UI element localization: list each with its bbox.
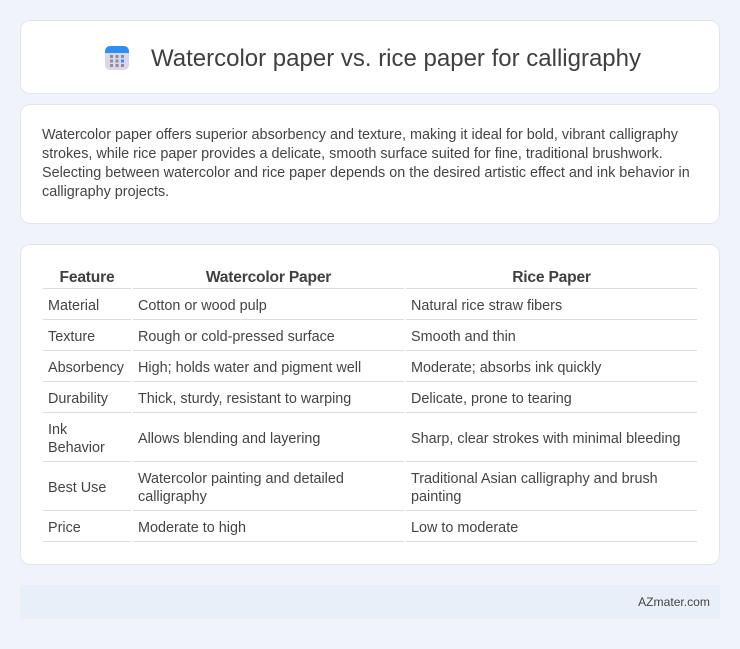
comparison table: Moderate to high <box>138 520 246 536</box>
comparison table: Cotton or wood pulp <box>138 298 267 314</box>
comparison table: calligraphy <box>138 489 207 505</box>
summary text: calligraphy projects. <box>42 184 169 200</box>
title card <box>20 20 720 94</box>
comparison table: Thick, sturdy, resistant to warping <box>138 391 351 407</box>
summary text: Selecting between watercolor and rice paper depends on the desired artistic effect and ink behavior in <box>42 165 690 181</box>
comparison table: Best Use <box>48 480 106 496</box>
comparison table: Natural rice straw fibers <box>411 298 562 314</box>
comparison table: Low to moderate <box>411 520 518 536</box>
comparison table: Watercolor painting and detailed <box>138 471 344 487</box>
comparison table: Sharp, clear strokes with minimal bleeding <box>411 431 681 447</box>
comparison table: Feature <box>60 269 114 286</box>
comparison table: Material <box>48 298 99 314</box>
comparison table: Rough or cold-pressed surface <box>138 329 335 345</box>
comparison table: Traditional Asian calligraphy and brush <box>411 471 658 487</box>
table card <box>20 244 720 565</box>
comparison table: Moderate; absorbs ink quickly <box>411 360 601 376</box>
comparison table: Ink <box>48 422 67 438</box>
summary text <box>42 127 690 200</box>
footer bar <box>20 585 720 619</box>
comparison table: Delicate, prone to tearing <box>411 391 572 407</box>
comparison table: Durability <box>48 391 108 407</box>
comparison table: Smooth and thin <box>411 329 516 345</box>
summary text: Watercolor paper offers superior absorbency and texture, making it ideal for bold, vibrant calligraphy <box>42 127 678 143</box>
comparison table: Behavior <box>48 440 105 456</box>
comparison table: Allows blending and layering <box>138 431 320 447</box>
comparison table: Absorbency <box>48 360 124 376</box>
icon: calendar <box>105 46 129 70</box>
comparison table: Watercolor Paper <box>206 269 331 286</box>
footer credit: AZmater.com <box>638 595 710 609</box>
comparison table: Rice Paper <box>512 269 591 286</box>
comparison table <box>48 269 681 536</box>
comparison table: painting <box>411 489 461 505</box>
comparison table: Texture <box>48 329 95 345</box>
title: Watercolor paper vs. rice paper for calligraphy <box>151 45 641 72</box>
comparison table: High; holds water and pigment well <box>138 360 361 376</box>
summary text: strokes, while rice paper provides a delicate, smooth surface suited for fine, traditional brushwork. <box>42 146 663 162</box>
comparison table: Price <box>48 520 81 536</box>
summary card <box>20 104 720 224</box>
